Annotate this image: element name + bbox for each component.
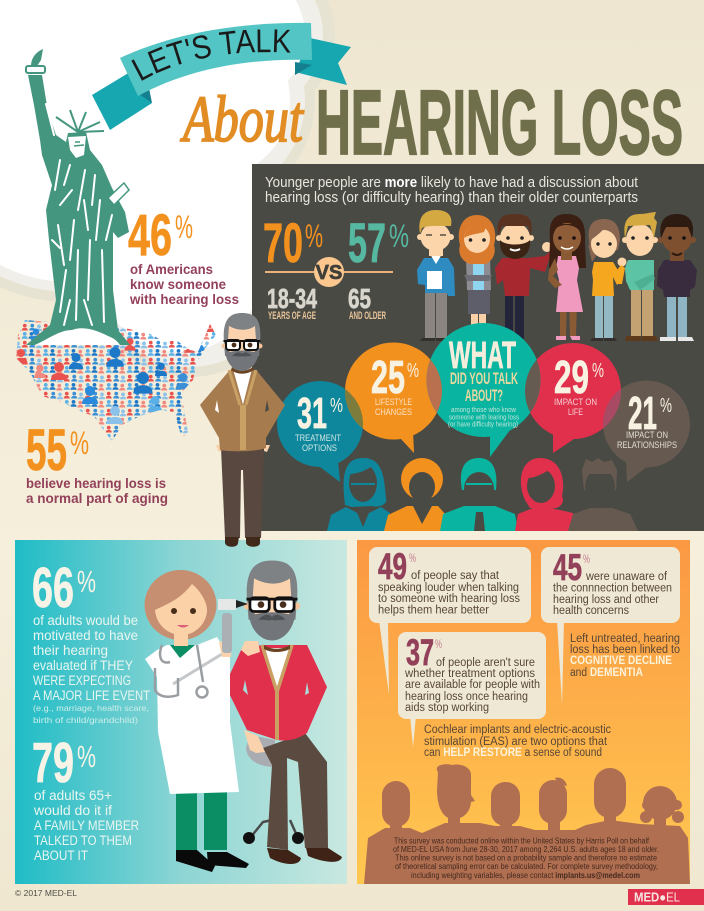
callout: 49%: % <box>409 551 416 565</box>
callout: 49% <box>369 546 531 695</box>
panel: dark younger vs older <box>252 164 704 531</box>
speech bubble: what did you talk about: WHAT <box>449 335 516 377</box>
callout: 45%: health concerns <box>553 605 629 617</box>
person 5 <box>588 219 626 341</box>
stat: 66% motivated by life event <box>32 556 150 725</box>
comparison: 70% vs 57%: VS <box>316 262 342 284</box>
silhouettes of five talkers <box>327 458 638 531</box>
text: left untreated: COGNITIVE DECLINE <box>570 655 672 667</box>
silhouette audience <box>364 764 690 884</box>
silhouette: green man <box>440 458 518 531</box>
bubble labels: percentages: 21 <box>628 387 657 439</box>
stat: 46% of Americans: with hearing loss <box>129 292 239 307</box>
text: left untreated <box>570 633 680 679</box>
stat: 79% family member: would do it if <box>33 803 112 818</box>
bubble labels: percentages: LIFE <box>568 407 583 417</box>
bubble labels: percentages: 31 <box>297 389 327 438</box>
panel heading: younger people: Younger people are more likely to have had a discussion about <box>265 175 638 191</box>
bubble labels: percentages: RELATIONSHIPS <box>617 440 677 450</box>
person 4 <box>548 214 586 340</box>
speech bubble: what did you talk about: (or have difficulty hearing) <box>448 422 518 428</box>
speech bubble: 21% impact on relationships <box>603 380 690 482</box>
bubble labels: percentages: % <box>330 395 343 417</box>
stat: 55% believe normal part of aging: % <box>70 425 89 461</box>
stat: 55% believe normal part of aging: a normal part of aging <box>26 491 168 506</box>
stat: 66% motivated by life event: birth of child/grandchild) <box>33 715 138 725</box>
bubble labels: percentages: OPTIONS <box>302 443 337 453</box>
comparison: 70% vs 57% <box>263 211 409 322</box>
callout: 37%: of people aren't sure <box>436 657 535 669</box>
callout: 49%: helps them hear better <box>378 604 489 616</box>
text: cochlear implants: can HELP RESTORE a sense of sound <box>424 747 602 759</box>
stat: 79% family member: of adults 65+ <box>34 788 112 803</box>
panel: teal motivation <box>15 540 347 884</box>
statue of liberty <box>26 49 130 345</box>
comparison: 70% vs 57%: 65 <box>348 283 371 314</box>
stat: 79% family member <box>32 731 139 863</box>
comparison: 70% vs 57%: YEARS OF AGE <box>268 310 316 322</box>
stat: 66% motivated by life event: evaluated if THEY <box>33 658 133 673</box>
callout: 45%: 45 <box>553 547 582 588</box>
bubble labels: percentages: TREATMENT <box>295 433 341 443</box>
speech bubble: what did you talk about: DID YOU TALK <box>450 369 518 388</box>
title banner: LET'S TALK: LET'S TALK <box>132 29 290 81</box>
survey methodology note: including weighting variables, please contact implants.us@medel.com <box>411 871 640 880</box>
stat: 66% motivated by life event: (e.g., marriage, health scare, <box>33 703 149 713</box>
doctor with otoscope <box>144 570 260 872</box>
stat: 55% believe normal part of aging <box>26 418 168 506</box>
callout: 37%: are available for people with <box>405 679 540 691</box>
cloud backdrop <box>0 0 335 377</box>
stat: 46% of Americans <box>128 203 239 307</box>
map: USA of people icons <box>15 320 216 441</box>
seated man in red cardigan <box>225 560 342 864</box>
title banner: LET'S TALK <box>92 22 351 130</box>
stat: 66% motivated by life event: % <box>77 564 96 599</box>
stat: 66% motivated by life event: their hearing <box>33 643 108 658</box>
callout: 37% <box>398 632 546 747</box>
stat: 55% believe normal part of aging: 55 <box>26 418 67 483</box>
comparison: 70% vs 57%: % <box>305 218 323 254</box>
stat: 79% family member: ABOUT IT <box>34 848 88 863</box>
callout: 49%: of people say that <box>411 570 500 582</box>
text: cochlear implants <box>424 724 611 759</box>
stat: 66% motivated by life event: 66 <box>32 556 74 620</box>
callout: 49%: speaking louder when talking <box>378 582 519 594</box>
bubble labels: percentages: % <box>407 360 419 382</box>
comparison: 70% vs 57%: % <box>389 218 409 254</box>
panel heading: younger people <box>265 175 638 206</box>
stat: 55% believe normal part of aging: believe hearing loss is <box>26 476 166 491</box>
stat: 46% of Americans: know someone <box>130 277 226 292</box>
speech bubble: what did you talk about: ABOUT? <box>465 386 503 405</box>
silhouette: orange woman <box>384 458 449 531</box>
logo: MED-EL <box>628 889 704 905</box>
speech bubble: what did you talk about: someone with learing loss <box>449 414 519 422</box>
survey methodology note: This survey was conducted online within the United States by Harris Poll on behalf <box>394 836 650 846</box>
bubble labels: percentages: IMPACT ON <box>554 397 597 407</box>
speech bubble: what did you talk about: among those who know <box>451 407 517 414</box>
bubble labels: percentages: 25 <box>371 351 405 403</box>
text: left untreated: loss has been linked to <box>570 644 680 656</box>
speech bubble: 29% impact on life <box>530 343 621 453</box>
stat: 79% family member: 79 <box>32 731 74 795</box>
panel: orange facts <box>357 540 690 884</box>
bubble labels: percentages: LIFESTYLE <box>375 397 412 407</box>
person 1 <box>417 210 455 341</box>
copyright: © 2017 MED-EL <box>15 888 77 898</box>
callout: 49%: to someone with hearing loss <box>378 593 520 605</box>
bubble labels: percentages: CHANGES <box>375 407 412 417</box>
panel heading: younger people: hearing loss (or difficulty hearing) than their older counterparts <box>265 190 638 206</box>
survey methodology note: of MED-EL USA from June 28-30, 2017 among 2,264 U.S. adults ages 18 and older. <box>393 845 659 854</box>
stat: 79% family member: A FAMILY MEMBER <box>34 818 139 833</box>
speech bubble: 25% lifestyle changes <box>345 342 437 453</box>
callout: 45%: hearing loss and other <box>553 594 659 606</box>
silhouette: red woman <box>515 458 578 531</box>
stat: 79% family member: % <box>77 739 96 774</box>
comparison: 70% vs 57%: 57 <box>348 211 386 274</box>
person 2 <box>459 215 495 338</box>
callout: 37%: whether treatment options <box>404 668 535 680</box>
callout: 45%: the connnection between <box>553 582 672 594</box>
bubble labels: percentages: % <box>592 360 604 382</box>
stat: 79% family member: TALKED TO THEM <box>34 833 132 848</box>
callout: 37%: hearing loss once hearing <box>405 691 528 703</box>
speech bubble: 31% treatment options <box>277 381 363 482</box>
text: cochlear implants: stimulation (EAS) are two options that <box>424 736 608 748</box>
speech bubble: what did you talk about <box>426 323 540 457</box>
standing man in brown cardigan <box>200 313 285 547</box>
title: About: About <box>180 83 304 156</box>
group of seven young people <box>417 210 697 341</box>
stat: 66% motivated by life event: of adults would be <box>33 613 138 628</box>
person 3 <box>495 214 552 339</box>
text: cochlear implants: Cochlear implants and electric-acoustic <box>424 724 611 736</box>
stat: 66% motivated by life event: motivated to have <box>33 628 138 643</box>
bubble labels: percentages <box>295 351 677 453</box>
callout: 37%: % <box>435 637 442 651</box>
stat: 46% of Americans: % <box>175 209 193 245</box>
person 7 <box>657 214 697 341</box>
callout: 37%: 37 <box>406 632 434 673</box>
silhouette: blue woman <box>327 458 392 531</box>
person 6 <box>622 212 658 341</box>
survey methodology note: This online survey is not based on a probability sample and therefore no estimate <box>395 854 658 862</box>
text: left untreated: Left untreated, hearing <box>570 633 680 645</box>
stat: 46% of Americans: 46 <box>128 203 172 268</box>
text: left untreated: and DEMENTIA <box>570 667 643 679</box>
silhouette: brown man <box>568 458 638 531</box>
bubble labels: percentages: 29 <box>554 351 589 403</box>
callout: 45%: % <box>583 552 590 566</box>
survey methodology note: of theoretical sampling error can be calculated. For complete survey methodology, <box>395 862 658 871</box>
callout: 37%: aids stop working <box>405 702 489 714</box>
comparison: 70% vs 57%: 18-34 <box>267 283 317 314</box>
callout: 45%: were unaware of <box>585 571 668 583</box>
stat: 66% motivated by life event: A MAJOR LIFE EVENT <box>33 688 150 703</box>
bubble labels: percentages: % <box>660 395 672 417</box>
callout: 49%: 49 <box>378 546 407 587</box>
comparison: 70% vs 57%: 70 <box>263 211 303 274</box>
logo: MED-EL: MED●EL <box>634 890 680 904</box>
stat: 66% motivated by life event: WERE EXPECTING <box>33 673 131 688</box>
bubble labels: percentages: IMPACT ON <box>626 430 668 440</box>
stat: 46% of Americans: of Americans <box>130 262 213 277</box>
survey methodology note <box>393 836 659 880</box>
comparison: 70% vs 57%: AND OLDER <box>349 310 386 322</box>
callout: 45% <box>541 547 680 705</box>
